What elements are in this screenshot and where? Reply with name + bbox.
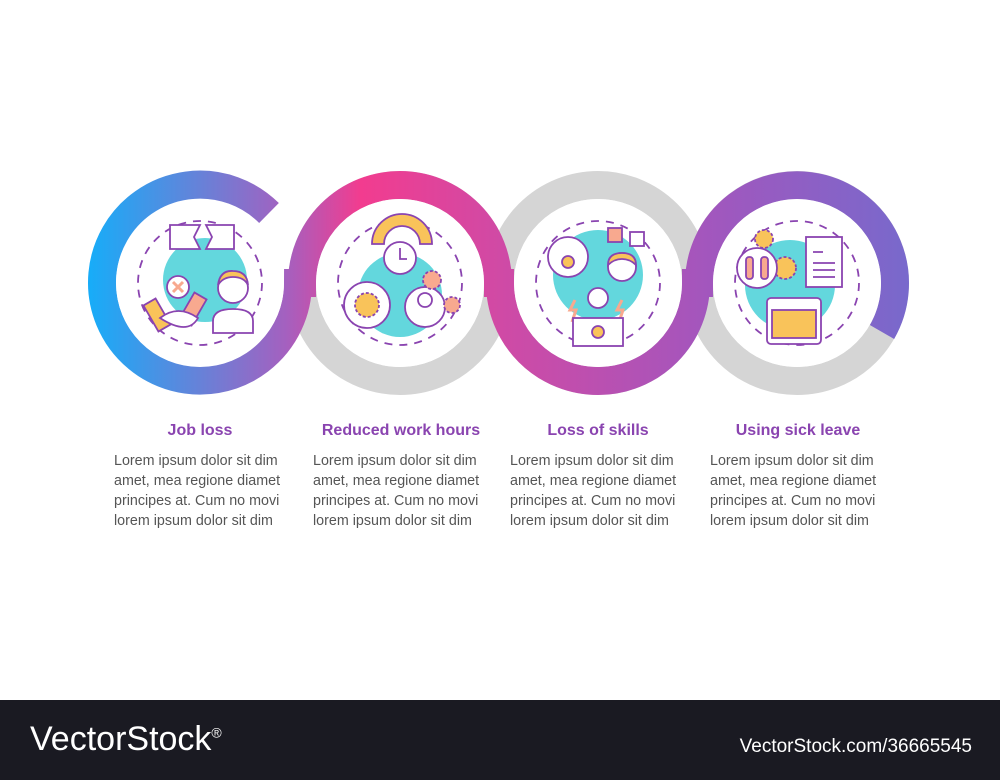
text: job loss: principes at. Cum no movi xyxy=(114,493,279,509)
text: reduced work hours: Lorem ipsum dolor sit dim xyxy=(313,453,477,469)
heading: loss of skills: Loss of skills xyxy=(547,422,649,439)
white disks xyxy=(116,199,881,367)
text: job loss: amet, mea regione diamet xyxy=(114,473,280,489)
text: loss of skills: lorem ipsum dolor sit dim xyxy=(510,513,669,529)
icon: loss of skills xyxy=(536,221,660,346)
text: using sick leave: amet, mea regione diamet xyxy=(710,473,876,489)
text: loss of skills xyxy=(510,453,676,529)
ribbon xyxy=(102,185,895,381)
gray rings xyxy=(302,185,895,381)
icon: job loss xyxy=(138,221,262,345)
text: reduced work hours: principes at. Cum no movi xyxy=(313,493,478,509)
text: loss of skills: amet, mea regione diamet xyxy=(510,473,676,489)
text: job loss xyxy=(114,453,280,529)
text: reduced work hours: amet, mea regione diamet xyxy=(313,473,479,489)
text: using sick leave: lorem ipsum dolor sit dim xyxy=(710,513,869,529)
icon: reduced work hours xyxy=(338,214,462,345)
text: job loss: lorem ipsum dolor sit dim xyxy=(114,513,273,529)
text: reduced work hours xyxy=(313,453,479,529)
footer logo: VectorStock® xyxy=(30,720,222,758)
icon: using sick leave xyxy=(735,221,859,345)
heading: reduced work hours: Reduced work hours xyxy=(322,422,480,439)
text: using sick leave xyxy=(710,453,876,529)
text: reduced work hours: lorem ipsum dolor sit dim xyxy=(313,513,472,529)
text: using sick leave: Lorem ipsum dolor sit dim xyxy=(710,453,874,469)
text: job loss: Lorem ipsum dolor sit dim xyxy=(114,453,278,469)
footer bar xyxy=(0,700,1000,780)
footer url: VectorStock.com/36665545 xyxy=(740,736,972,757)
text: loss of skills: principes at. Cum no movi xyxy=(510,493,675,509)
heading: using sick leave: Using sick leave xyxy=(736,422,860,439)
heading: job loss: Job loss xyxy=(168,422,232,439)
text: loss of skills: Lorem ipsum dolor sit dim xyxy=(510,453,674,469)
diagram: ribbon with circles xyxy=(88,170,909,395)
text: using sick leave: principes at. Cum no movi xyxy=(710,493,875,509)
